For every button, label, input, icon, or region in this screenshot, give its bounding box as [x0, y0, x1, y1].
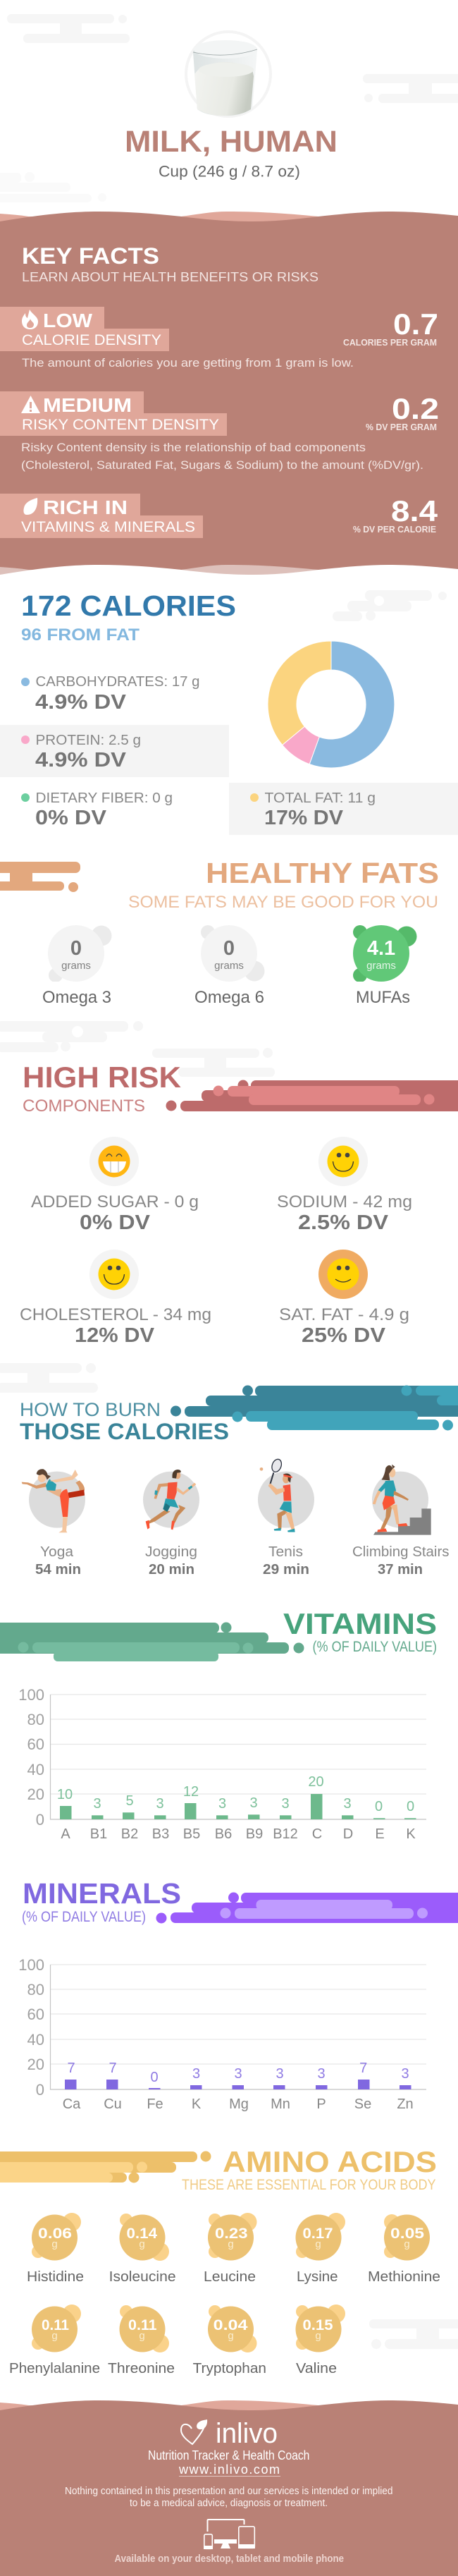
icon: devices [204, 2520, 255, 2549]
activity: tennis: Tenis [268, 1544, 303, 1560]
availability note: Available on your desktop, tablet and mobile phone [114, 2553, 344, 2565]
panel: footer [0, 2400, 458, 2576]
legend: total fat [229, 783, 458, 835]
panel: healthy fats [0, 857, 439, 1007]
panel: minerals [18, 1877, 458, 2112]
bar chart: vitamins: B6 [215, 1826, 232, 1842]
activity: climbing stairs: Climbing Stairs [352, 1544, 450, 1560]
stat: omega 3 [42, 925, 111, 1007]
amino: methionine: g [404, 2238, 410, 2250]
decoration: red stripes [166, 1080, 458, 1111]
card: calorie density [0, 307, 438, 370]
stat: mufas: 4.1 [367, 937, 395, 960]
header: milk [125, 32, 338, 181]
legend: protein: PROTEIN: 2.5 g [35, 733, 141, 748]
amino: tryptophan: g [228, 2330, 234, 2342]
activity: climbing stairs: 37 min [378, 1562, 423, 1577]
tagline: Nutrition Tracker & Health Coach [148, 2448, 309, 2462]
amino: isoleucine: Isoleucine [109, 2269, 176, 2285]
item: sodium: SODIUM - 42 mg [277, 1192, 412, 1211]
stat: omega 6: Omega 6 [194, 988, 264, 1007]
label: VITAMINS & MINERALS [21, 519, 195, 535]
amino: threonine [108, 2305, 175, 2376]
decoration: teal stripes [171, 1385, 458, 1430]
bar chart: vitamins: 10 [57, 1787, 73, 1802]
legend: carbohydrates: CARBOHYDRATES: 17 g [35, 674, 200, 690]
label: RISKY CONTENT DENSITY [22, 417, 219, 433]
title: MILK, HUMAN [125, 125, 338, 159]
value: 0.7 [393, 307, 438, 341]
bar chart: vitamins: 60 [27, 1735, 44, 1753]
rating: LOW [43, 310, 93, 331]
value: 8.4 [391, 494, 438, 527]
amino: lysine: 0.17 [303, 2226, 333, 2242]
item: cholesterol: CHOLESTEROL - 34 mg [20, 1305, 211, 1324]
bar chart: vitamins: 3 [156, 1796, 164, 1812]
bar chart: minerals: Se [354, 2096, 371, 2112]
subheading: (% OF DAILY VALUE) [22, 1909, 146, 1925]
bar chart: vitamins: K [406, 1826, 416, 1842]
amino: threonine: g [139, 2330, 145, 2342]
disclaimer [65, 2485, 393, 2509]
amino: phenylalanine: g [51, 2330, 58, 2342]
panel: vitamins [0, 1607, 437, 1842]
stat: omega 3: 0 [70, 937, 82, 960]
bar chart: vitamins: B2 [121, 1826, 138, 1842]
bar chart: minerals [18, 1956, 426, 2112]
amino: leucine [204, 2213, 256, 2285]
subheading: SOME FATS MAY BE GOOD FOR YOU [128, 893, 438, 912]
amino: lysine [296, 2213, 345, 2285]
item: saturated fat: 25% DV [302, 1324, 386, 1347]
amino: methionine [368, 2214, 440, 2285]
unit: % DV PER CALORIE [353, 524, 436, 535]
bar chart: vitamins: 3 [249, 1795, 258, 1811]
bar chart: minerals: 100 [18, 1956, 44, 1974]
bar chart: vitamins: 3 [281, 1796, 290, 1812]
bar chart: vitamins: 80 [27, 1711, 44, 1728]
item: sodium: 2.5% DV [298, 1211, 389, 1234]
amino: leucine: Leucine [204, 2269, 256, 2285]
amino: tryptophan [193, 2305, 266, 2376]
heading: high risk: HIGH RISK [23, 1061, 181, 1094]
amino: phenylalanine [9, 2305, 100, 2376]
item: sodium [277, 1137, 412, 1234]
logo: inlivo [181, 2418, 278, 2449]
bar chart: vitamins: 100 [18, 1686, 44, 1704]
bar chart: minerals: 3 [276, 2066, 284, 2082]
item: saturated fat: SAT. FAT - 4.9 g [279, 1305, 409, 1324]
heading: calories: 172 CALORIES [21, 590, 236, 622]
activity: jogging: 20 min [149, 1562, 194, 1577]
value: 0.2 [392, 392, 439, 425]
bar chart: minerals: P [316, 2096, 326, 2112]
item: cholesterol: 12% DV [75, 1324, 155, 1347]
subheading: (% OF DAILY VALUE) [313, 1639, 437, 1655]
bar chart: vitamins: 20 [27, 1786, 44, 1803]
bar chart: vitamins: 3 [93, 1796, 101, 1812]
heading: amino acids: AMINO ACIDS [223, 2145, 437, 2178]
bar chart: minerals: 0 [36, 2081, 44, 2099]
stat: mufas [353, 925, 417, 1007]
heading: healthy fats: HEALTHY FATS [206, 857, 439, 889]
amino: histidine: Histidine [27, 2269, 84, 2285]
logo: inlivo: inlivo [216, 2418, 278, 2449]
activity: tennis [258, 1458, 314, 1577]
bar chart: minerals: 3 [317, 2066, 326, 2082]
unit: CALORIES PER GRAM [343, 337, 437, 348]
decoration: orange stripes [0, 862, 80, 892]
bar chart: minerals: 3 [192, 2066, 200, 2082]
bar chart: minerals: 40 [27, 2031, 44, 2049]
bar chart: minerals: 3 [401, 2066, 409, 2082]
bar chart: minerals: 0 [150, 2070, 159, 2085]
icon: climbing stairs figure [372, 1465, 431, 1535]
subheading: from fat: 96 FROM FAT [21, 625, 140, 645]
legend: dietary fiber: DIETARY FIBER: 0 g [35, 790, 173, 806]
legend: carbohydrates [21, 674, 200, 714]
panel: amino acids [0, 2145, 440, 2376]
legend: protein [0, 725, 229, 777]
bar chart: vitamins: 3 [218, 1796, 226, 1812]
legend: total fat: TOTAL FAT: 11 g [265, 790, 376, 806]
amino: leucine: g [228, 2238, 234, 2250]
bar chart: minerals: 80 [27, 1981, 44, 1998]
website link: www.inlivo.com [178, 2462, 280, 2477]
item: added sugar [31, 1137, 199, 1234]
disclaimer: to be a medical advice, diagnosis or treatment. [130, 2497, 328, 2509]
amino: lysine: Lysine [297, 2269, 338, 2285]
bar chart: vitamins: C [312, 1826, 322, 1842]
amino: tryptophan: 0.04 [213, 2317, 248, 2333]
amino: tryptophan: Tryptophan [193, 2361, 266, 2376]
stat: omega 6 [194, 925, 265, 1007]
bar chart: minerals: Fe [147, 2096, 163, 2112]
stat: omega 3: Omega 3 [42, 988, 111, 1007]
legend: carbohydrates: 4.9% DV [35, 691, 127, 714]
amino: histidine: g [51, 2238, 58, 2250]
panel: how to burn those calories [20, 1385, 458, 1577]
legend: protein: 4.9% DV [35, 749, 127, 771]
bar chart: vitamins: E [375, 1826, 385, 1842]
unit: % DV PER GRAM [366, 422, 437, 432]
amino: histidine: 0.06 [38, 2226, 72, 2242]
amino: histidine [27, 2213, 84, 2285]
bar chart: vitamins: 0 [407, 1799, 414, 1814]
bar chart: minerals: Cu [104, 2096, 122, 2112]
heading line 2: THOSE CALORIES [20, 1419, 229, 1444]
description: The amount of calories you are getting from 1 gram is low. [22, 356, 354, 370]
card: risky content density [0, 391, 439, 472]
panel: key facts [0, 212, 458, 585]
amino: threonine: Threonine [108, 2361, 175, 2376]
bar chart: minerals: 3 [234, 2066, 242, 2082]
bar chart: minerals: Mg [229, 2096, 249, 2112]
bar chart: minerals: 7 [67, 2061, 75, 2076]
bar chart: vitamins: 40 [27, 1761, 44, 1778]
activity: climbing stairs [352, 1465, 450, 1577]
bar chart: minerals: Zn [397, 2096, 414, 2112]
rating: RICH IN [43, 496, 128, 518]
bar chart: vitamins: 3 [343, 1796, 352, 1812]
bar chart: minerals: 7 [359, 2061, 367, 2076]
heading: key facts: KEY FACTS [22, 243, 159, 269]
description: (Cholesterol, Saturated Fat, Sugars & Sodium) to the amount (%DV/gr). [21, 458, 423, 472]
amino: isoleucine: g [139, 2238, 145, 2250]
amino: valine [296, 2305, 345, 2376]
amino: isoleucine [109, 2214, 176, 2285]
activity: yoga: 54 min [35, 1562, 81, 1577]
bar chart: vitamins: 20 [308, 1774, 324, 1790]
disclaimer: Nothing contained in this presentation and our services is intended or implied [65, 2485, 393, 2497]
activity: jogging [143, 1470, 199, 1577]
stat: omega 3: grams [61, 960, 91, 972]
legend: dietary fiber [21, 790, 173, 829]
activity: yoga [22, 1469, 85, 1577]
panel: calories [0, 590, 458, 835]
bar chart: minerals: 20 [27, 2056, 44, 2073]
amino: methionine: Methionine [368, 2269, 440, 2285]
icon: jogging figure [143, 1470, 199, 1530]
subheading: LEARN ABOUT HEALTH BENEFITS OR RISKS [22, 269, 318, 284]
description [21, 441, 423, 472]
bar chart: minerals: 60 [27, 2006, 44, 2023]
stat: mufas: MUFAs [356, 988, 410, 1007]
activity: jogging: Jogging [145, 1544, 197, 1560]
icon: warning [21, 396, 40, 413]
icon: tennis figure [258, 1458, 314, 1532]
bar chart: vitamins: B12 [273, 1826, 298, 1842]
bar chart: vitamins: 0 [36, 1811, 44, 1829]
heading: vitamins: VITAMINS [283, 1607, 437, 1640]
activity: tennis: 29 min [263, 1562, 309, 1577]
heading line 1: HOW TO BURN [20, 1399, 161, 1420]
stat: omega 6: 0 [223, 937, 235, 960]
amino: isoleucine: 0.14 [127, 2226, 157, 2242]
bar chart: minerals: Mn [271, 2096, 290, 2112]
stat: omega 6: grams [214, 960, 244, 972]
item: added sugar: ADDED SUGAR - 0 g [31, 1192, 199, 1211]
legend: dietary fiber: 0% DV [35, 807, 107, 829]
heading: minerals: MINERALS [23, 1877, 181, 1910]
decoration: green stripes [0, 1622, 304, 1661]
amino: leucine: 0.23 [215, 2226, 248, 2242]
icon: flame [22, 310, 38, 329]
amino: phenylalanine: Phenylalanine [9, 2361, 100, 2376]
bar chart: vitamins [18, 1686, 426, 1842]
amino: valine: 0.15 [303, 2317, 333, 2333]
bar chart: minerals: 7 [109, 2061, 117, 2076]
panel: high risk components [20, 1061, 458, 1347]
decoration: yellow stripes [0, 2151, 211, 2183]
decoration: purple stripes [156, 1893, 458, 1924]
activity: yoga: Yoga [40, 1544, 74, 1560]
bar chart: vitamins: 5 [125, 1793, 134, 1809]
subheading: components: COMPONENTS [23, 1097, 145, 1116]
item: added sugar: 0% DV [80, 1211, 151, 1234]
donut chart [268, 641, 395, 768]
bar chart: vitamins: B5 [183, 1826, 200, 1842]
icon: leaf [23, 498, 37, 515]
bar chart: vitamins: B9 [246, 1826, 263, 1842]
bar chart: vitamins: 0 [375, 1799, 383, 1814]
bar chart: vitamins: D [343, 1826, 353, 1842]
icon: yoga figure [22, 1469, 85, 1532]
amino: methionine: 0.05 [390, 2226, 424, 2242]
bar chart: vitamins: B1 [90, 1826, 107, 1842]
label: CALORIE DENSITY [22, 332, 161, 348]
rating: MEDIUM [43, 394, 132, 416]
description: Risky Content density is the relationship of bad components [21, 441, 366, 454]
amino: phenylalanine: 0.11 [42, 2317, 69, 2333]
bar chart: minerals: K [192, 2096, 202, 2112]
item: saturated fat [279, 1250, 409, 1347]
amino: threonine: 0.11 [128, 2317, 157, 2333]
amino: valine: g [315, 2330, 321, 2342]
card: rich in vitamins and minerals [0, 494, 438, 538]
bar chart: minerals: Ca [63, 2096, 81, 2112]
amino: valine: Valine [296, 2361, 337, 2376]
legend: total fat: 17% DV [264, 807, 344, 829]
bar chart: vitamins: B3 [152, 1826, 169, 1842]
amino: lysine: g [315, 2238, 321, 2250]
stat: mufas: grams [366, 960, 396, 972]
serving size: Cup (246 g / 8.7 oz) [159, 162, 300, 181]
bar chart: vitamins: 12 [183, 1784, 199, 1800]
item: cholesterol [20, 1250, 211, 1347]
bar chart: vitamins: A [61, 1826, 70, 1842]
icon: glass of milk [186, 32, 271, 116]
